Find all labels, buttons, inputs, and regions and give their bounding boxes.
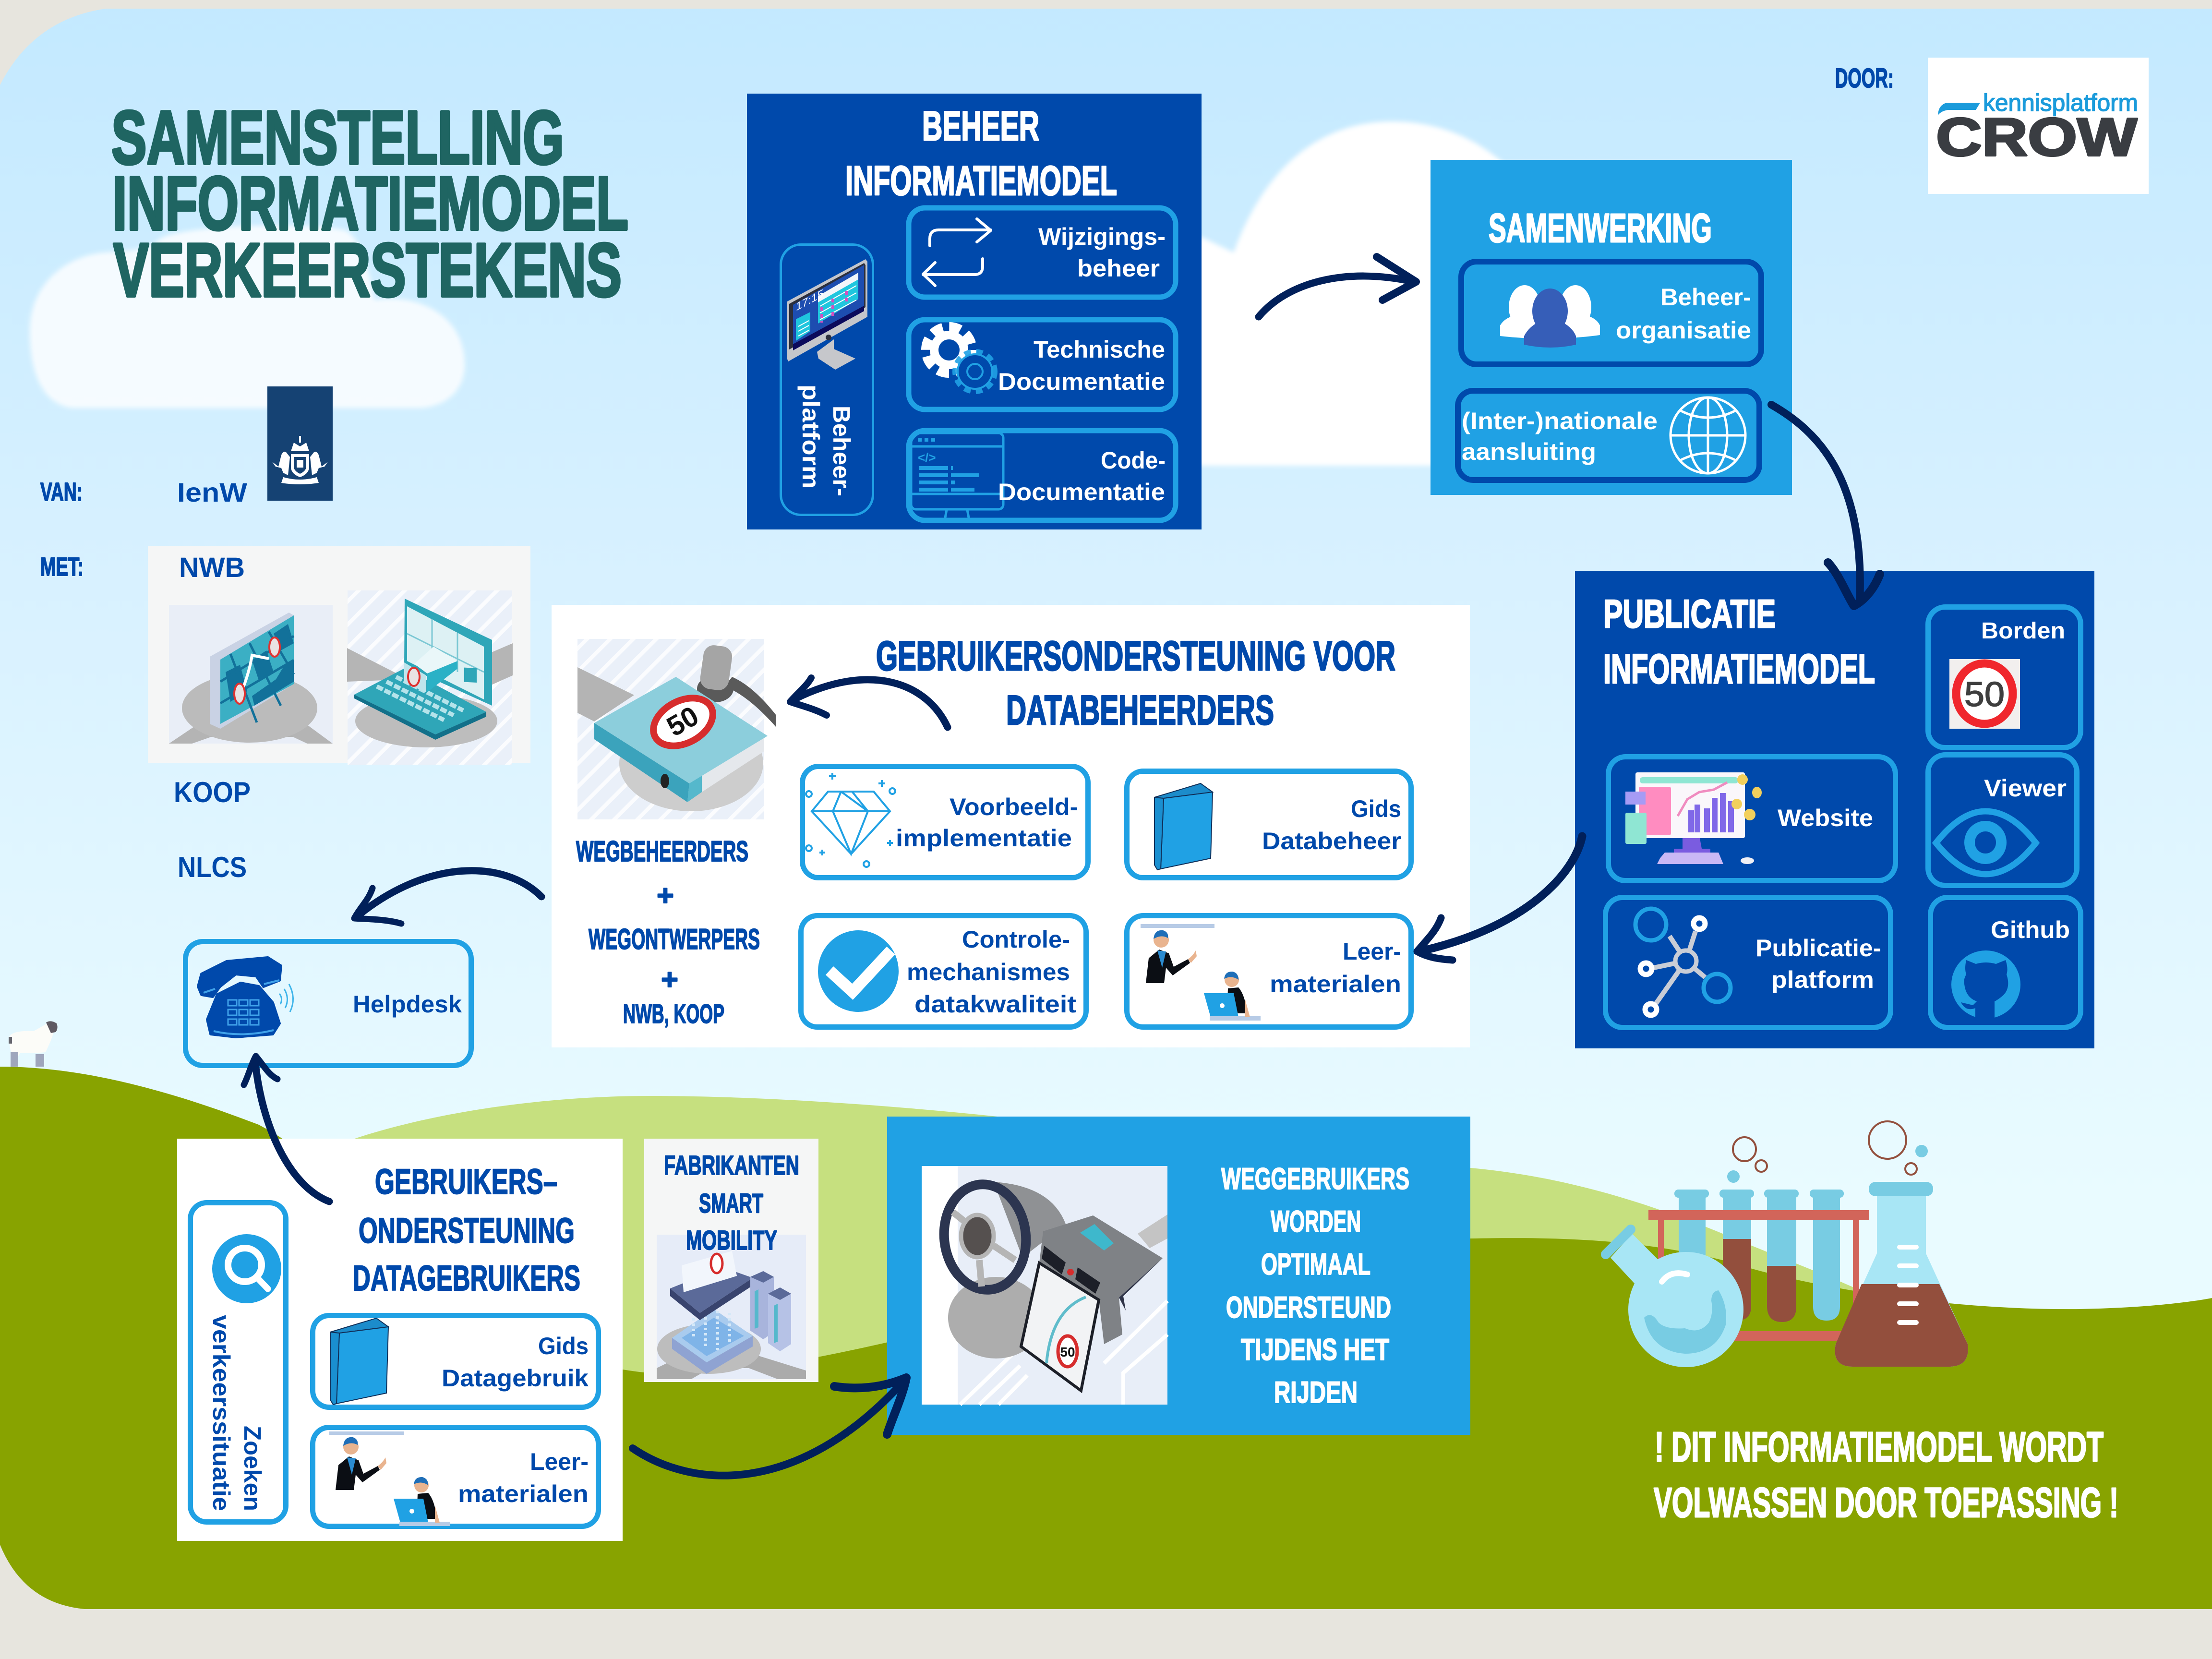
icon: monitor: [787, 259, 867, 370]
text block: weggebruikers worden optimaal ondersteund tijdens het rijden: WORDEN: [1271, 1205, 1361, 1238]
logo: kennisplatform CROW: CROW: [1936, 107, 2137, 167]
text block: weggebruikers worden optimaal ondersteund tijdens het rijden: TIJDENS HET: [1241, 1333, 1389, 1367]
box: internationale aansluiting: [1458, 391, 1759, 480]
box: zoeken verkeerssituatie: [190, 1203, 286, 1522]
heading: gebruikersondersteuning datagebruikers: ONDERSTEUNING: [359, 1211, 575, 1250]
arrow: publicatie to leermaterialen: [1417, 836, 1582, 960]
label: gids datagebruik: Gids: [538, 1333, 589, 1359]
label: voorbeeldimplementatie: implementatie: [896, 825, 1072, 852]
label: publicatieplatform: Publicatie-: [1755, 935, 1881, 962]
label: gids databeheer: [1262, 795, 1401, 854]
icon: gears: [926, 327, 995, 392]
icon: monitor: 17:15: [796, 287, 824, 314]
label: website: Website: [1778, 805, 1873, 831]
logo: kennisplatform CROW: [1928, 58, 2149, 194]
heading: fabrikanten smart mobility: MOBILITY: [686, 1225, 777, 1256]
icon: globe: [1671, 397, 1745, 473]
icon: book: [1154, 783, 1213, 870]
label: leermaterialen: Leer-: [530, 1448, 589, 1475]
illustration: map with signs: [169, 605, 333, 744]
box: gids databeheer: [1127, 771, 1411, 878]
label: wijzigingsbeheer: Wijzigings-: [1038, 223, 1166, 250]
box: voorbeeldimplementatie: [803, 766, 1088, 878]
heading: gebruikersondersteuning voor databeheerders: [876, 633, 1395, 733]
text block: doelgroepen: [576, 835, 760, 1029]
panel: beheer informatiemodel: [747, 94, 1202, 529]
label: zoeken verkeerssituatie: verkeerssituatie: [208, 1315, 235, 1511]
heading: fabrikanten smart mobility: FABRIKANTEN: [664, 1150, 799, 1181]
box: github: [1931, 898, 2080, 1027]
label: code documentatie: Documentatie: [998, 479, 1165, 505]
icon: network: [1635, 909, 1731, 1015]
heading: gebruikersondersteuning datagebruikers: DATAGEBRUIKERS: [353, 1258, 580, 1298]
arrow: datagebruikers to helpdesk: [244, 1056, 329, 1202]
label: controlemechanismes datakwaliteit: mechanismes: [907, 959, 1070, 986]
illustration: folder with gavel: [577, 639, 776, 819]
arrow: databeheerders to folder: [790, 678, 948, 727]
text block: doelgroepen: WEGBEHEERDERS: [576, 835, 748, 867]
icon: code window: [911, 433, 1003, 520]
label: leermaterialen: materialen: [1270, 971, 1401, 998]
heading: publicatie informatiemodel: INFORMATIEMODEL: [1603, 646, 1875, 692]
label: leermaterialen: materialen: [458, 1480, 589, 1507]
arrow: samenwerking to publicatie: [1771, 405, 1880, 606]
icon: book: [330, 1318, 388, 1405]
label: controlemechanismes datakwaliteit: datakwaliteit: [914, 991, 1076, 1018]
label: zoeken verkeerssituatie: Zoeken: [239, 1426, 266, 1511]
label: NWB: NWB: [179, 552, 245, 583]
icon: desktop with chart: [1625, 772, 1762, 864]
illustration: folder with gavel: 50: [661, 700, 704, 743]
icon: sheep on the hill: [9, 1021, 58, 1067]
label: controlemechanismes datakwaliteit: [907, 926, 1076, 1018]
box: gids datagebruik: [313, 1315, 598, 1407]
label: beheerorganisatie: Beheer-: [1660, 284, 1751, 311]
text block: weggebruikers worden optimaal ondersteund tijdens het rijden: OPTIMAAL: [1261, 1248, 1370, 1281]
box: borden: [1928, 607, 2080, 748]
title: INFORMATIEMODEL: [112, 161, 628, 246]
illustration: car dashboard: [922, 1166, 1167, 1405]
label: viewer: Viewer: [1984, 775, 2067, 802]
text block: doelgroepen: +: [661, 963, 678, 996]
label: leermaterialen: [458, 1448, 589, 1507]
label: gids datagebruik: Datagebruik: [442, 1365, 589, 1392]
label: code documentatie: [998, 447, 1166, 505]
heading: gebruikersondersteuning datagebruikers: [353, 1162, 580, 1298]
label: NLCS: NLCS: [178, 851, 247, 883]
box: technische documentatie: [909, 320, 1176, 409]
label: gids databeheer: Gids: [1351, 795, 1401, 822]
arrow: databeheerders to helpdesk: [354, 871, 541, 924]
icon: search: [212, 1234, 281, 1303]
heading: beheer informatiemodel: BEHEER: [922, 103, 1039, 149]
label: technische documentatie: [998, 336, 1165, 395]
text block: weggebruikers worden optimaal ondersteund tijdens het rijden: WEGGEBRUIKERS: [1221, 1162, 1409, 1196]
icon: teacher and student: [1141, 924, 1261, 1021]
icon: speed sign 50: 50: [1964, 675, 2005, 714]
title: SAMENSTELLING: [111, 96, 564, 180]
illustration: data center: [657, 1235, 806, 1379]
panel: gebruikersondersteuning voor databeheerders: [552, 605, 1470, 1047]
panel: van IenW: [40, 386, 333, 507]
label: beheerplatform: platform: [797, 385, 824, 489]
icon: check: [818, 930, 899, 1012]
label: met: MET:: [40, 553, 84, 581]
logo: kennisplatform CROW: kennisplatform: [1983, 89, 2138, 116]
label: beheerplatform: Beheer-: [828, 406, 855, 496]
icon: teacher and student: [329, 1431, 450, 1526]
box: leermaterialen datagebruikers: [313, 1428, 598, 1527]
panel: weggebruikers: [887, 1117, 1470, 1435]
label: beheerorganisatie: [1616, 284, 1751, 344]
label: technische documentatie: Technische: [1034, 336, 1165, 363]
box: beheerorganisatie: [1461, 262, 1761, 364]
heading: fabrikanten smart mobility: SMART: [699, 1188, 763, 1219]
title: VERKEERSTEKENS: [113, 228, 622, 313]
heading: fabrikanten smart mobility: [664, 1150, 799, 1256]
illustration: car dashboard: 50: [1060, 1345, 1075, 1359]
heading: publicatie informatiemodel: [1603, 591, 1875, 692]
panel: gebruikersondersteuning datagebruikers: [177, 1139, 623, 1541]
panel: publicatie informatiemodel: [1575, 571, 2094, 1048]
icon: telephone: [198, 958, 293, 1037]
arrow: beheer to samenwerking: [1259, 257, 1416, 317]
icon: code window: </>: [918, 450, 936, 465]
label: publicatieplatform: platform: [1771, 966, 1874, 993]
text block: weggebruikers worden optimaal ondersteund tijdens het rijden: ONDERSTEUND: [1226, 1291, 1391, 1324]
label: zoeken verkeerssituatie: [208, 1315, 266, 1511]
box: wijzigingsbeheer: [909, 208, 1176, 297]
label: borden: Borden: [1981, 618, 2065, 644]
illustration: laptop with drawer: [347, 590, 513, 765]
label: internationale aansluiting: (Inter-)nationale: [1462, 408, 1658, 434]
label: gids datagebruik: [442, 1333, 589, 1392]
label: publicatieplatform: [1755, 935, 1881, 993]
text block: weggebruikers worden optimaal ondersteund tijdens het rijden: [1221, 1162, 1409, 1409]
label: leermaterialen: [1270, 938, 1401, 998]
heading: gebruikersondersteuning datagebruikers: GEBRUIKERS–: [375, 1162, 557, 1202]
illustration: lab glassware: [1606, 1121, 1968, 1367]
callout: volwassen door toepassing: [1654, 1424, 2118, 1526]
arrow: datagebruikers to weggebruikers: [633, 1378, 906, 1476]
box: code documentatie: [909, 431, 1176, 520]
box: viewer: [1928, 755, 2077, 885]
label: voorbeeldimplementatie: [896, 793, 1078, 852]
icon: github: [1951, 950, 2020, 1019]
heading: publicatie informatiemodel: PUBLICATIE: [1603, 591, 1776, 636]
label: wijzigingsbeheer: [1038, 223, 1166, 282]
label: door: DOOR:: [1835, 63, 1894, 94]
icon: diamond: [806, 773, 895, 867]
label: leermaterialen: Leer-: [1343, 938, 1401, 965]
panel: met partners: [40, 546, 530, 883]
text block: doelgroepen: NWB, KOOP: [623, 998, 724, 1029]
box: controlemechanismes datakwaliteit: [801, 916, 1086, 1027]
label: IenW: IenW: [177, 477, 247, 507]
icon: eye: [1936, 811, 2036, 874]
label: van: VAN:: [40, 478, 83, 506]
heading: gebruikersondersteuning voor databeheerders: DATABEHEERDERS: [1006, 687, 1274, 733]
label: voorbeeldimplementatie: Voorbeeld-: [950, 793, 1078, 820]
icon: speed sign 50: [1949, 659, 2020, 729]
background panel NWB: [148, 546, 530, 763]
box: website: [1608, 757, 1895, 880]
heading: beheer informatiemodel: INFORMATIEMODEL: [845, 158, 1117, 204]
text block: weggebruikers worden optimaal ondersteund tijdens het rijden: RIJDEN: [1274, 1376, 1358, 1409]
heading: beheer informatiemodel: [845, 103, 1117, 204]
title: [111, 96, 628, 313]
label: github: Github: [1991, 916, 2070, 943]
label: beheerplatform: [797, 385, 855, 496]
panel: samenwerking: [1431, 160, 1792, 495]
label: controlemechanismes datakwaliteit: Controle-: [962, 926, 1070, 953]
box: helpdesk: [185, 942, 471, 1066]
label: internationale aansluiting: [1462, 408, 1658, 465]
heading: samenwerking: SAMENWERKING: [1489, 205, 1712, 251]
text block: doelgroepen: +: [657, 879, 674, 912]
label: KOOP: KOOP: [174, 776, 251, 808]
label: internationale aansluiting: aansluiting: [1462, 438, 1596, 465]
icon: swap arrows: [923, 219, 991, 286]
heading: gebruikersondersteuning voor databeheerders: GEBRUIKERSONDERSTEUNING VOOR: [876, 633, 1395, 679]
panel: fabrikanten smart mobility: [644, 1139, 818, 1382]
label: wijzigingsbeheer: beheer: [1077, 255, 1160, 282]
box: leermaterialen: [1127, 916, 1411, 1027]
text block: doelgroepen: WEGONTWERPERS: [589, 923, 760, 955]
label: helpdesk: Helpdesk: [353, 991, 462, 1018]
label: gids databeheer: Databeheer: [1262, 828, 1401, 854]
label: beheerorganisatie: organisatie: [1616, 317, 1751, 344]
box: publicatieplatform: [1605, 898, 1890, 1027]
box: beheerplatform: [781, 245, 873, 515]
logo: rijksoverheid: [267, 386, 333, 501]
label: code documentatie: Code-: [1101, 447, 1166, 474]
label: technische documentatie: Documentatie: [998, 368, 1165, 395]
icon: people: [1500, 285, 1600, 348]
